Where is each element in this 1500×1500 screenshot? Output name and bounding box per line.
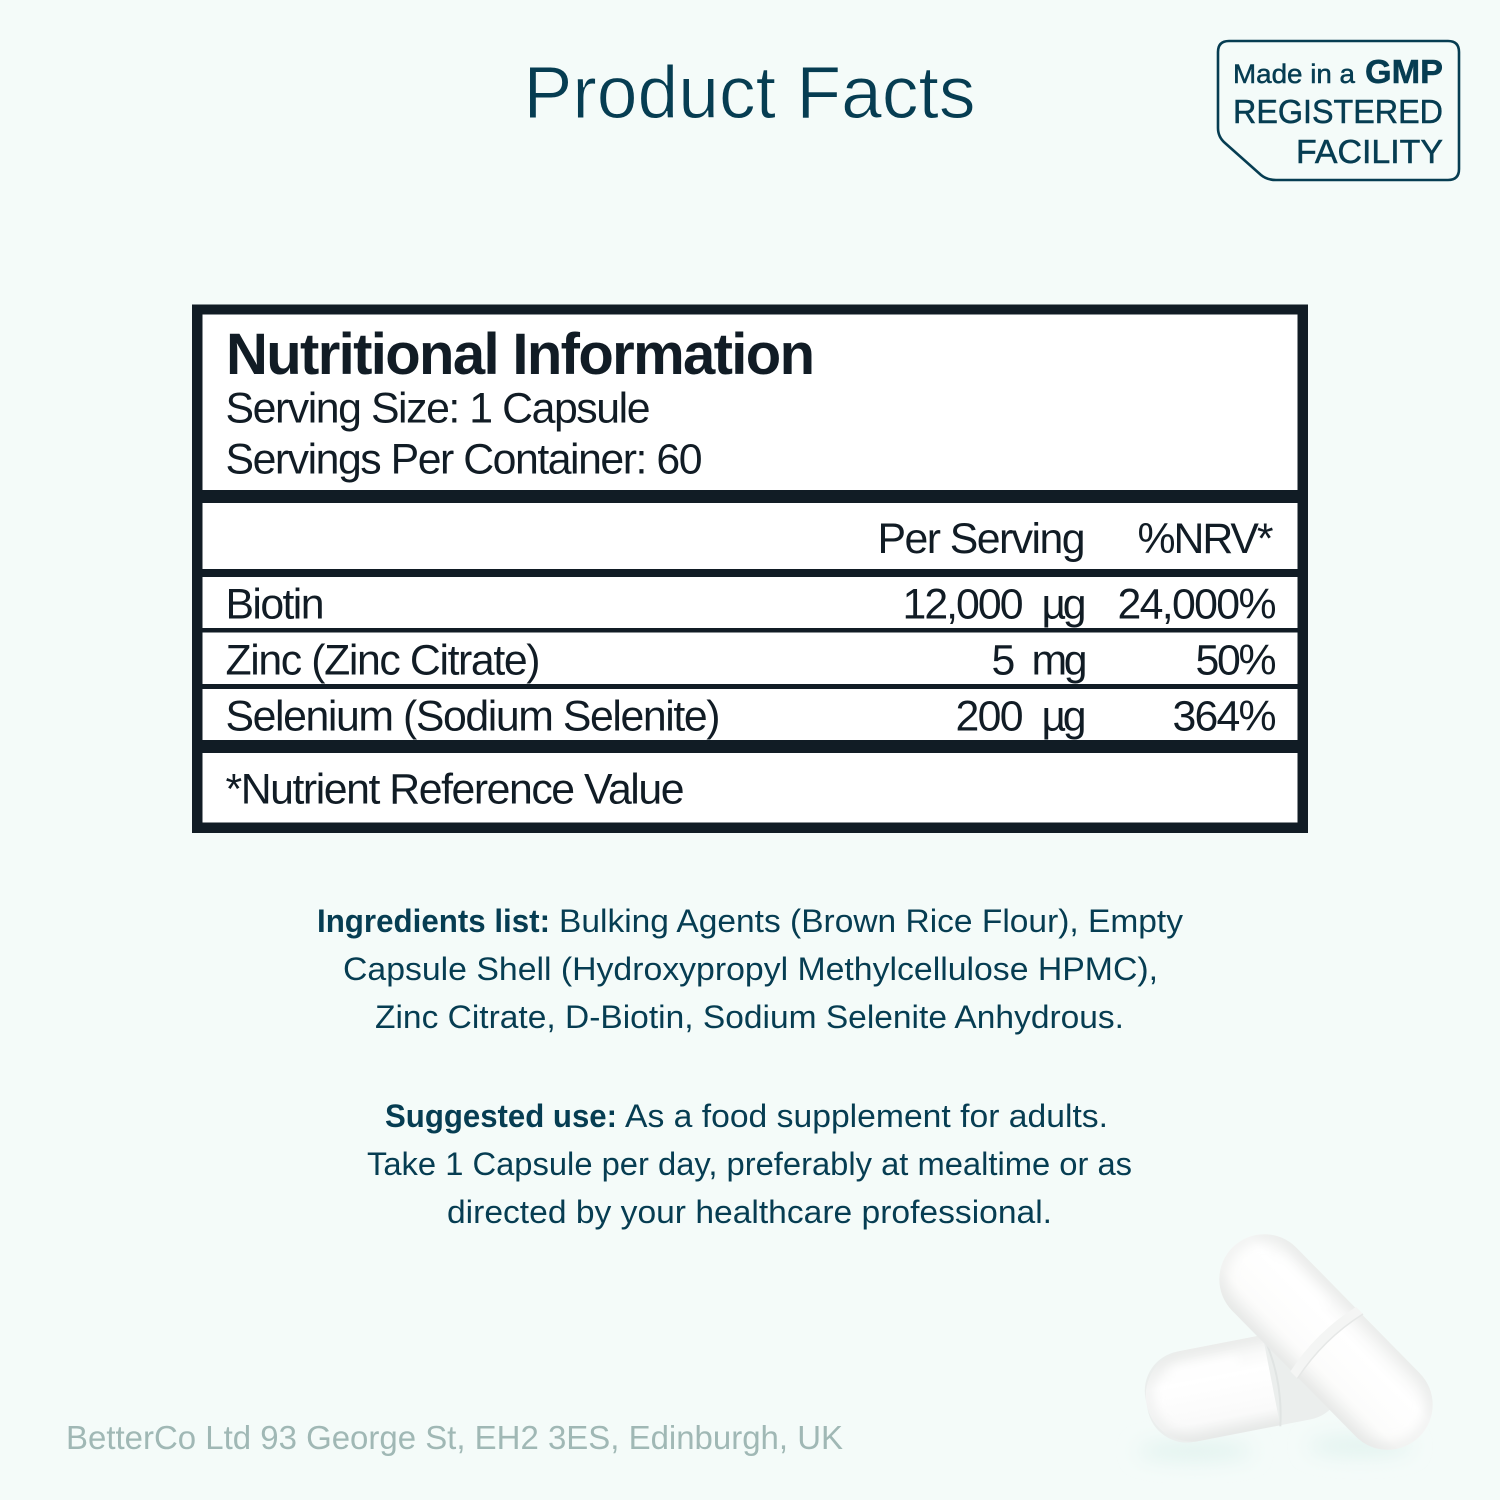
- serving information: Serving Size: 1 Capsule: [226, 384, 650, 432]
- table heading: Nutritional Information: [226, 322, 815, 387]
- badge text: Made in a: [1233, 59, 1356, 89]
- text block: ingredients list: [317, 903, 1183, 1035]
- row: selenium: 364%: [1172, 692, 1276, 740]
- row: selenium: 200: [956, 692, 1024, 740]
- text block: suggested use: directed by your healthcare professional.: [447, 1194, 1052, 1230]
- column headers: [878, 515, 1274, 563]
- text block: ingredients list: Ingredients list:: [317, 903, 550, 939]
- icon: white capsules: [1145, 1234, 1432, 1462]
- badge text: FACILITY: [1296, 133, 1443, 170]
- row: zinc: 5: [992, 636, 1015, 684]
- serving information: Servings Per Container: 60: [226, 436, 702, 484]
- badge: GMP registered facility: [1218, 41, 1459, 180]
- text block: suggested use: As a food supplement for adults.: [625, 1098, 1108, 1134]
- row: zinc: 50%: [1196, 636, 1276, 684]
- row: biotin: Biotin: [226, 580, 324, 628]
- badge text: [1233, 53, 1443, 170]
- row: biotin: 12,000: [902, 580, 1024, 628]
- badge text: REGISTERED: [1233, 93, 1443, 130]
- text block: suggested use: Take 1 Capsule per day, preferably at mealtime or as: [367, 1146, 1132, 1182]
- row: zinc: Zinc (Zinc Citrate): [226, 636, 540, 684]
- row: selenium: µg: [1042, 692, 1086, 740]
- row: biotin: µg: [1042, 580, 1086, 628]
- badge text: GMP: [1365, 53, 1443, 90]
- text block: suggested use: Suggested use:: [385, 1098, 617, 1134]
- panel: nutritional information table: [192, 304, 1308, 833]
- row: zinc: [226, 636, 1276, 684]
- row: selenium: [226, 692, 1276, 740]
- upper capsule: [1220, 1234, 1432, 1450]
- column headers: %NRV*: [1138, 515, 1274, 563]
- row: selenium: Selenium (Sodium Selenite): [226, 692, 720, 740]
- text block: ingredients list: Capsule Shell (Hydroxypropyl Methylcellulose HPMC),: [343, 951, 1158, 987]
- text block: ingredients list: Bulking Agents (Brown Rice Flour), Empty: [559, 903, 1183, 939]
- title: Product Facts: [524, 51, 976, 134]
- table footnote: *Nutrient Reference Value: [226, 766, 684, 814]
- badge outline: [1218, 41, 1459, 180]
- text block: suggested use: [367, 1098, 1132, 1230]
- row: biotin: 24,000%: [1118, 580, 1276, 628]
- lower capsule: [1145, 1336, 1330, 1442]
- capsule shadows: [1137, 1437, 1412, 1460]
- text block: ingredients list: Zinc Citrate, D-Biotin, Sodium Selenite Anhydrous.: [375, 999, 1124, 1035]
- row: biotin: [226, 580, 1276, 628]
- column headers: Per Serving: [878, 515, 1086, 563]
- company address: BetterCo Ltd 93 George St, EH2 3ES, Edinburgh, UK: [66, 1419, 843, 1456]
- row: zinc: mg: [1032, 636, 1088, 684]
- serving information: [226, 384, 702, 484]
- table frame: [192, 304, 1308, 833]
